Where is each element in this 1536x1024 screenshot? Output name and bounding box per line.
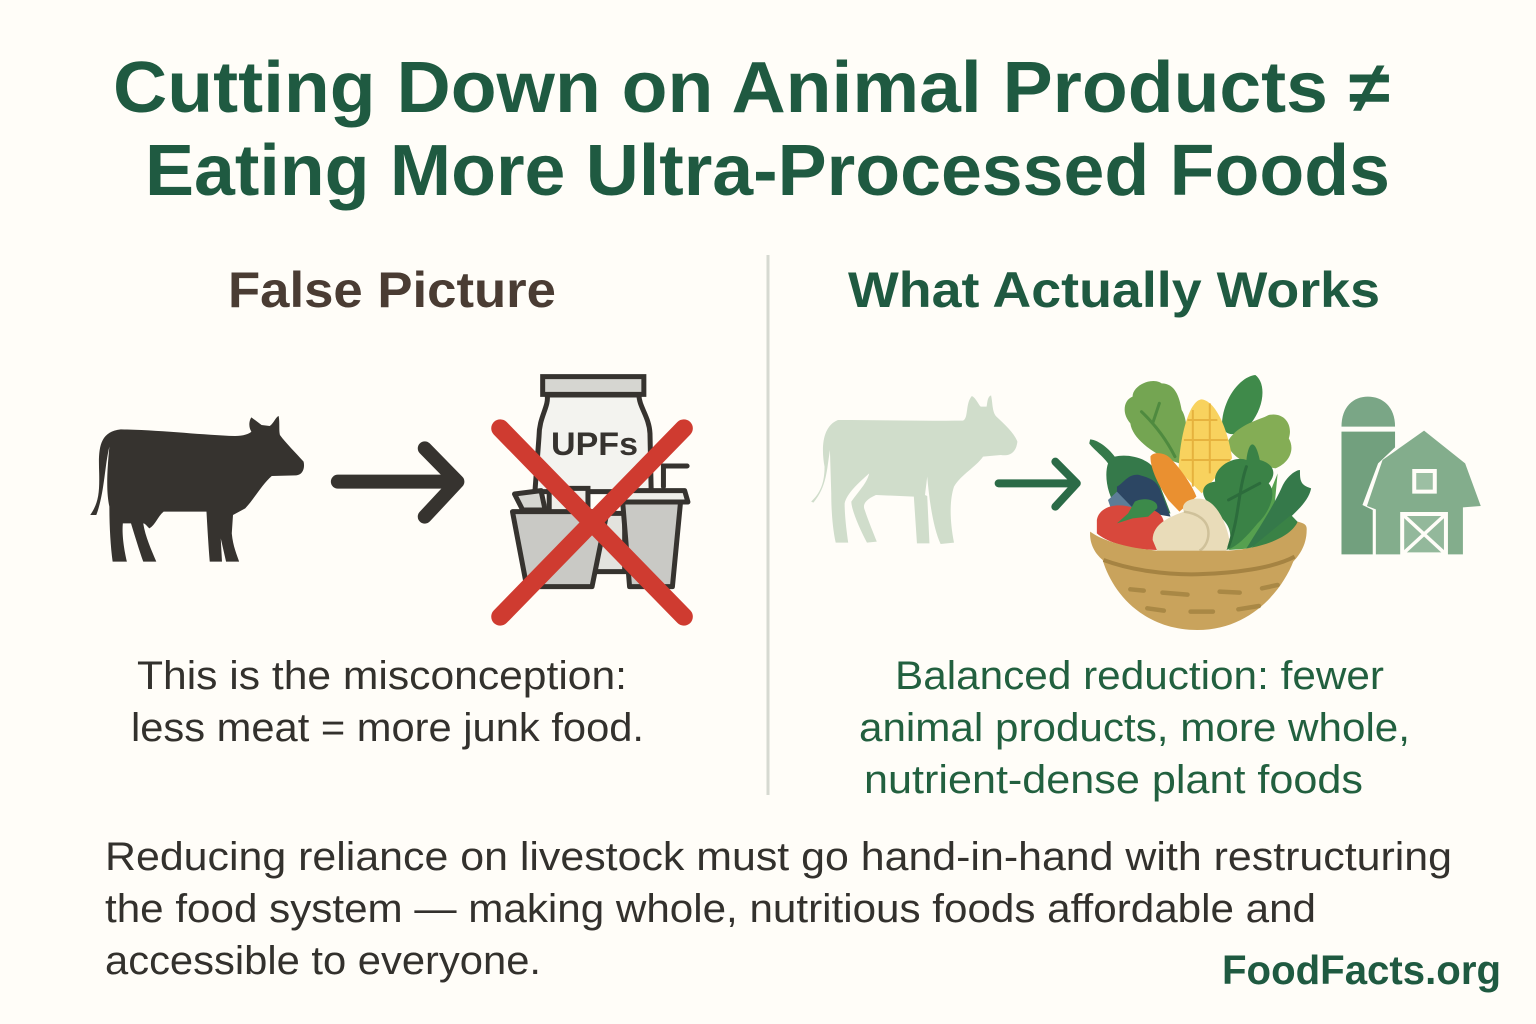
text: conclusion: the food system — making whole, nutritious foods affordable and: [105, 887, 1316, 931]
text: conclusion: Reducing reliance on livestock must go hand-in-hand with restructuring: [105, 835, 1452, 879]
brand: FoodFacts.org: FoodFacts.org: [1222, 947, 1501, 993]
text: misconception: This is the misconception:: [137, 654, 627, 698]
text: balanced reduction: [859, 654, 1410, 802]
title: [113, 48, 1390, 211]
text: balanced reduction: nutrient-dense plant foods: [864, 758, 1363, 802]
arrow: dark: [338, 448, 457, 517]
text: conclusion: accessible to everyone.: [105, 939, 541, 983]
text: balanced reduction: Balanced reduction: fewer: [895, 654, 1384, 698]
title: Eating More Ultra-Processed Foods: [145, 131, 1390, 211]
text: balanced reduction: animal products, more whole,: [859, 706, 1410, 750]
title: Cutting Down on Animal Products ≠: [113, 48, 1390, 128]
text: conclusion: [105, 835, 1452, 983]
text: misconception: [131, 654, 644, 750]
heading: what actually works: What Actually Works: [848, 262, 1380, 318]
panel: what actually works: [811, 262, 1481, 802]
heading: false picture: False Picture: [228, 262, 556, 318]
panel: false picture: [90, 262, 688, 750]
text: misconception: less meat = more junk food.: [131, 706, 644, 750]
arrow: green: [999, 462, 1077, 507]
icon: faded cow: [811, 395, 1017, 544]
icon: crossed out UPF packages: [500, 377, 688, 617]
icon: vegetable basket: [1089, 375, 1311, 630]
icon: dark cow: [90, 416, 304, 562]
icon: barn and silo: [1341, 397, 1481, 554]
icon: crossed out UPF packages: UPFs: [551, 426, 638, 462]
